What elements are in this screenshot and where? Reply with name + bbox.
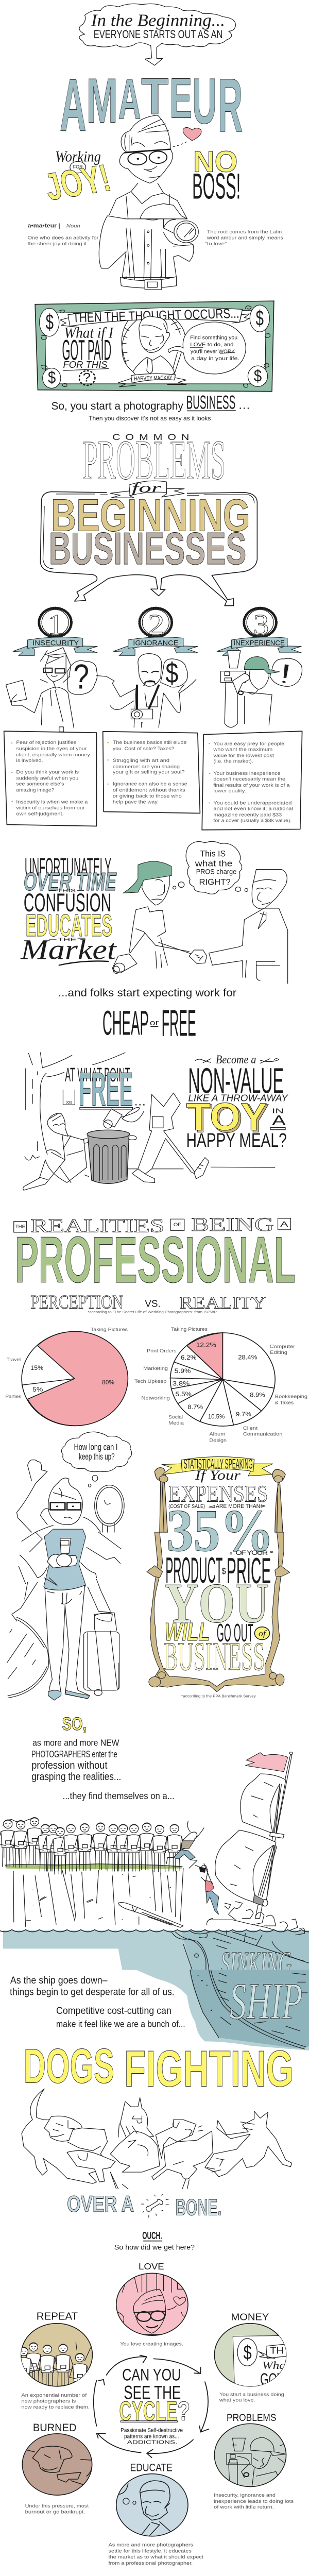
- illustration: tree: [26, 1053, 125, 1094]
- bill corner ornaments: [40, 305, 270, 388]
- pie chart: perception: [5, 1327, 128, 1426]
- character: insecure woman: [6, 648, 97, 732]
- text: see the cycle: CYCLE: [119, 2396, 177, 2426]
- panel: common problems heading: [13, 429, 301, 655]
- box: insecurity list: amazing image?: [16, 788, 54, 793]
- box: ignorance list: you. Cost of sale? Taxes?: [113, 746, 175, 752]
- badge 3: inexperience: [217, 608, 301, 655]
- text: no boss: NO: [193, 145, 237, 178]
- pie chart: reality: Editing: [270, 1350, 287, 1355]
- panel: definition and money bill: [28, 216, 283, 442]
- title: amateur: A: [60, 63, 87, 147]
- pie chart: perception: 5%: [32, 1386, 43, 1394]
- box: inexperience list: who want the maximum: [213, 747, 272, 752]
- text: see the cycle: ?: [177, 2396, 190, 2426]
- text: start a photography business: [51, 392, 250, 421]
- caption: educate: the market as to what it should expect: [108, 2554, 203, 2560]
- panel: confusion educates the market: [20, 841, 288, 1101]
- illustration: camera dropped in trash: [80, 1107, 144, 1183]
- box: ignorance list: Ignorance can also be a sense: [113, 782, 187, 787]
- heading: common: COMMON: [112, 433, 189, 442]
- pie chart: reality: 8.9%: [250, 1392, 265, 1399]
- text: see the cycle: ADDICTIONS.: [127, 2439, 177, 2445]
- badge 2: ignorance: [113, 608, 198, 655]
- ornate sign continued: your product price you will go out of business: OF YOUR: [235, 1550, 268, 1557]
- hull and water bottom: [136, 1970, 309, 2050]
- text: ship goes down: make it feel like we are a bunch of...: [56, 2020, 185, 2029]
- ornate sign: statistically speaking: ARE MORE THAN: [216, 1502, 260, 1509]
- thought cloud: how long can i keep this up: How long can I: [74, 1443, 117, 1452]
- thought cloud: how long can i keep this up: [61, 1432, 132, 1487]
- text: what if i got paid: What if I: [64, 325, 114, 341]
- text: ship goes down: things begin to get desperate for all of us.: [10, 1986, 175, 1997]
- box: insecurity list: suspicion in the eyes of your: [16, 746, 87, 752]
- pie chart: reality: 8.7%: [187, 1404, 203, 1411]
- badge 2: ignorance: IGNORANCE: [133, 639, 178, 647]
- panel: over a bone and love: [21, 2194, 286, 2387]
- panel: perception vs reality pie charts: [5, 1327, 307, 1564]
- pie chart: reality: Social: [168, 1415, 183, 1420]
- text: so, as more and more: SO,: [62, 1714, 87, 1734]
- pie chart: reality: [134, 1327, 307, 1443]
- text: over time this confusion educates the market: Market: [20, 934, 117, 965]
- panel: confusion educates the market: EDUCATES: [26, 908, 112, 943]
- text: ouch: OUCH.: [142, 2230, 162, 2242]
- pie chart: reality: Computer: [269, 1344, 295, 1349]
- text: over a bone: [67, 2191, 221, 2220]
- text: new photographers: PHOTOGRAPHERS enter the: [31, 1750, 117, 1760]
- panel: three problems: UNFORTUNATELY: [25, 853, 111, 882]
- text: does free: ...: [134, 1096, 146, 1108]
- box: ignorance list: your gift or selling your soul?: [113, 770, 185, 775]
- cycle: problems: PROBLEMS: [227, 2412, 276, 2423]
- text: see the cycle: Passionate Self-destructive: [121, 2427, 183, 2433]
- jumping figures: [166, 1821, 219, 1914]
- text: over time this confusion educates the market: OVER TIME: [24, 868, 117, 895]
- title: amateur: [60, 63, 243, 148]
- text: working for joy: FOR: [73, 165, 83, 170]
- frame with arrows: [40, 492, 257, 606]
- panel: amateur intro: [40, 4, 243, 219]
- text: definition: the sheer joy of doing it: [28, 241, 87, 247]
- caption: repeat: An exponential number of: [21, 2393, 87, 2398]
- illustration: handshake: [112, 861, 288, 984]
- text: so, as more and more: as more and more NEW: [32, 1738, 119, 1748]
- text: can you: CAN YOU: [122, 2365, 181, 2384]
- text: what if i got paid: FOR THIS: [63, 359, 108, 370]
- heading: perception vs reality: REALITY: [179, 1293, 266, 1312]
- box: insecurity list: [4, 731, 96, 826]
- pie chart: reality: 5.5%: [176, 1391, 192, 1398]
- title: amateur: T: [141, 67, 169, 125]
- caption: educate: As more and more photographers: [108, 2543, 193, 2548]
- caption: educate: settle for this lifestyle, it educates: [108, 2549, 192, 2554]
- ornate sign continued: your product price you will go out of business: $: [221, 1566, 226, 1576]
- text: see the cycle: [119, 2382, 190, 2445]
- cycle arrows bottom: [94, 2380, 209, 2458]
- text: definition: a•ma•teur |: [28, 223, 60, 229]
- text: ouch: [114, 2230, 195, 2251]
- box: inexperience list: (i.e. the market).: [213, 759, 253, 764]
- bill corner ornaments: $: [254, 366, 262, 385]
- text: become a non-value: Become a: [216, 1053, 256, 1066]
- box: ignorance list: of entitlement without thanks: [113, 788, 185, 793]
- text: ouch: So how did we get here?: [114, 2244, 195, 2251]
- box: insecurity list: victim of ourselves from our: [16, 805, 85, 811]
- pie chart: perception: 15%: [30, 1365, 43, 1371]
- text: become a non-value: [188, 1053, 284, 1101]
- caption: problems: of work with little return.: [214, 2504, 274, 2510]
- citation: *according to "The Secret Life of Wedding Photographers" from ISPWP: [88, 1310, 217, 1314]
- ornate sign continued: your product price you will go out of business: of: [259, 1629, 267, 1638]
- box: ignorance list: commerce: are you sharing: [113, 764, 180, 769]
- character: woman full length with suitcase: [7, 1529, 121, 1700]
- text: definition: [28, 223, 99, 247]
- heading: perception vs reality: [30, 1292, 266, 1313]
- text: folks expect cheap or free: FREE: [162, 1002, 196, 1044]
- cycle: burned: [22, 2422, 92, 2495]
- ornate sign continued: your product price you will go out of business: *according to the PPA Benchmark Survey: [181, 1693, 256, 1698]
- text: latin root: The root comes from the Latin: [207, 229, 282, 234]
- badge 1: insecurity: INSECURITY: [32, 639, 79, 647]
- ornate sign: statistically speaking: If Your: [195, 1468, 241, 1483]
- box: insecurity list: own self-judgment.: [16, 811, 64, 817]
- character: inexperienced kid with cap: [221, 651, 302, 727]
- pie chart: reality: Tech Upkeep: [134, 1379, 166, 1384]
- money bill illustration: GOT PAID: [62, 334, 111, 366]
- pie chart: reality: Taking Pictures: [171, 1327, 208, 1332]
- pie chart: reality: 5.9%: [175, 1368, 191, 1375]
- pie chart: reality: Client: [243, 1426, 258, 1431]
- title: amateur: A: [118, 67, 141, 131]
- thought cloud: how long can i keep this up: keep this up?: [79, 1452, 115, 1462]
- cliff with grass: [5, 1864, 183, 1927]
- text: start a photography business: ...: [238, 400, 250, 412]
- text: throw-away toy in a happy meal: TOY: [188, 1096, 269, 1141]
- text: ship goes down: As the ship goes down–: [10, 1975, 108, 1986]
- panel: dogs fighting: [10, 1970, 309, 2189]
- heading: dogs fighting: DOGS: [24, 2039, 114, 2093]
- waves: [0, 1929, 309, 1932]
- heading: realities of being a: A: [280, 1220, 288, 1228]
- text: working for joy: JOY!: [40, 157, 115, 209]
- thought cloud: pros charge: [173, 841, 248, 894]
- text: what if i got paid: ?: [83, 370, 91, 384]
- bill ribbon: [60, 306, 249, 327]
- text: new photographers: ...they find themselves on a...: [63, 1791, 175, 1801]
- pie chart: reality: 3.8%: [173, 1380, 190, 1387]
- cycle: money: $: [244, 2342, 252, 2364]
- text: start a photography business: Then you discover it's not as easy as it looks: [89, 415, 211, 421]
- heading: realities of being a: [14, 1214, 290, 1236]
- cycle arrows top: [98, 2355, 201, 2385]
- box: inexperience list: doesn't necessarily mean the: [213, 776, 285, 782]
- pie chart: reality: Print Orders: [147, 1348, 176, 1354]
- cycle: love: LOVE: [139, 2262, 164, 2272]
- pie chart: perception: Travel: [7, 1357, 21, 1363]
- text: folks expect cheap or free: or: [150, 1019, 159, 1027]
- speech bubble: harvey mackay quote: LOVE to do, and: [190, 341, 233, 347]
- thought cloud: pros charge: RIGHT?: [199, 878, 231, 887]
- ornate sign: statistically speaking: (COST OF SALE): [168, 1503, 205, 1509]
- box: ignorance list: The business basics still elude: [113, 740, 186, 745]
- cycle: educate: [116, 2462, 188, 2536]
- ship hull top: [171, 1930, 309, 1982]
- text: no boss: [192, 145, 241, 207]
- box: ignorance list: Struggling with art and: [113, 758, 169, 764]
- box: inexperience list: and not even know it; a national: [213, 806, 293, 811]
- panel: sinking ship: [0, 1750, 309, 1982]
- box: insecurity list: is involved.: [16, 758, 43, 764]
- box: inexperience list: magazine recently paid $33: [213, 812, 282, 818]
- text: definition: One who does an activity for: [28, 235, 99, 241]
- thought cloud heading: In the Beginning...: [91, 11, 225, 30]
- bill corner ornaments: $: [48, 368, 56, 386]
- pie chart: perception: Parties: [5, 1394, 21, 1399]
- text: throw-away toy in a happy meal: A: [272, 1112, 286, 1128]
- panel: free becomes disposable: FREE: [79, 1063, 133, 1115]
- badge 1: insecurity: [13, 608, 97, 655]
- cycle: money: [214, 2312, 288, 2388]
- ornate sign continued: your product price you will go out of business: WILL: [165, 1618, 210, 1646]
- heading: perception vs reality: PERCEPTION: [30, 1292, 123, 1313]
- icon: bone: [142, 2194, 168, 2217]
- cycle: money: GOT: [260, 2370, 284, 2388]
- text: what if i got paid: [62, 325, 114, 385]
- box: insecurity list: Insecurity is when we make a: [16, 799, 88, 805]
- character: insecure woman: ?: [73, 657, 89, 696]
- text: R: [218, 63, 243, 148]
- pie chart: perception: 80%: [102, 1379, 114, 1386]
- caption: love: You love creating images.: [120, 2342, 183, 2347]
- ribbon: for: [110, 480, 184, 498]
- pie chart: reality: Design: [209, 1438, 227, 1443]
- box: ignorance list: help pave the way.: [113, 799, 159, 805]
- water and hull background: [3, 1930, 309, 1970]
- box: ignorance list: or giving back to those who: [113, 793, 182, 799]
- text: latin root: [205, 229, 283, 246]
- character: amateur sitting: [23, 1113, 89, 1190]
- caption: money: what you love.: [219, 2398, 255, 2403]
- pie chart: reality: 9.7%: [236, 1411, 251, 1418]
- text: new photographers: [31, 1750, 175, 1801]
- caption: burned: Under this pressure, most: [25, 2503, 89, 2509]
- cycle: love: [116, 2262, 188, 2335]
- ornate sign continued: your product price you will go out of business: [147, 1532, 289, 1698]
- pie chart: reality: Networking: [141, 1396, 170, 1401]
- panel: three problems: [4, 648, 302, 882]
- heading: realities of being a: THE: [15, 1224, 25, 1229]
- text: definition: Noun: [66, 224, 80, 229]
- caption: educate: [108, 2543, 203, 2566]
- character: ignorant man: $: [165, 656, 178, 689]
- caption: problems: Insecurity, ignorance and: [214, 2493, 276, 2498]
- box: inexperience list: [202, 731, 302, 830]
- heading: beginning businesses: [49, 489, 250, 574]
- pen in water: [118, 1903, 183, 1927]
- ornate sign: statistically speaking: [154, 1456, 285, 1564]
- box: insecurity list: see someone else's: [16, 782, 64, 787]
- bill corner ornaments: $: [256, 307, 264, 330]
- speech bubble: harvey mackay quote: [168, 322, 246, 374]
- text: start a photography business: So, you start a photography: [51, 400, 183, 412]
- character: ignorant man: [96, 654, 196, 727]
- speech bubble: harvey mackay quote: a day in your life.: [191, 355, 239, 362]
- people on deck: [207, 1902, 304, 1935]
- illustration: tree trunk and ground: [25, 1094, 275, 1169]
- panel: free becomes disposable: [14, 1063, 296, 1314]
- cycle: educate: EDUCATE: [130, 2462, 173, 2474]
- caption: repeat: [21, 2393, 90, 2410]
- text: over time this confusion educates the market: [20, 868, 117, 965]
- text: ship goes down: Competitive cost-cutting can: [56, 2005, 171, 2016]
- thought cloud heading: [79, 4, 235, 65]
- panel: woman and going out of business sign: [7, 1529, 289, 1748]
- box: inexperience list: Your business inexperience: [213, 771, 281, 776]
- thought cloud: pros charge: what the: [195, 859, 233, 869]
- illustration: dogs fighting: [22, 2089, 291, 2189]
- panel: confusion educates the market: AT WHAT POINT: [65, 1064, 130, 1086]
- box: inexperience list: You could be underappreciated: [213, 801, 291, 806]
- portrait: harvey mackay: [118, 316, 186, 387]
- portrait: harvey mackay: HARVEY MACKAY: [134, 374, 173, 382]
- text: new photographers: profession without: [31, 1759, 108, 1771]
- caption: problems: [214, 2493, 294, 2510]
- text: working for joy: Working: [55, 148, 101, 165]
- box: insecurity list: Do you think your work is: [16, 770, 79, 775]
- text: start a photography business: BUSINESS: [186, 392, 235, 413]
- cycle: money: TH: [270, 2346, 284, 2356]
- crowd of photographers: [0, 1818, 185, 1874]
- speech bubble: harvey mackay quote: Find something you: [190, 334, 237, 341]
- badge 3: inexperience: INEXPERIENCE: [233, 639, 285, 647]
- text: folks expect cheap or free: [58, 987, 236, 1044]
- cycle: repeat: [21, 2312, 93, 2387]
- caption: money: You start a business doing: [219, 2392, 284, 2397]
- cycle: money: Wha: [262, 2360, 286, 2371]
- text: see the cycle: patterns are known as...: [124, 2433, 179, 2439]
- pie chart: reality: & Taxes: [275, 1400, 294, 1405]
- panel: the cycle: [21, 2380, 294, 2566]
- ship mast, sails and flag: [215, 1752, 293, 1918]
- pie chart: reality: 6.2%: [181, 1354, 197, 1362]
- text: folks expect cheap or free: CHEAP: [102, 1004, 149, 1042]
- badge 1: insecurity: 1: [47, 609, 64, 641]
- panel: over a bone and love: BONE.: [176, 2195, 221, 2220]
- text: so, as more and more: [32, 1714, 119, 1748]
- character: amateur head: [108, 115, 201, 219]
- pie chart: reality: Media: [168, 1420, 184, 1426]
- box: inexperience list: You are easy prey for people: [213, 741, 284, 747]
- ribbon: for: for: [132, 480, 162, 495]
- cycle: problems: [214, 2412, 286, 2488]
- title: amateur: M: [87, 66, 118, 136]
- text: ship goes down: [10, 1975, 185, 2029]
- box: insecurity list: suddenly awful when you: [16, 776, 78, 781]
- pie chart: reality: 28.4%: [238, 1354, 258, 1361]
- text: throw-away toy in a happy meal: TOY: [186, 1095, 267, 1139]
- cycle: burned: BURNED: [33, 2422, 76, 2434]
- money bill illustration: [35, 301, 274, 392]
- badge 2: ignorance: 2: [148, 609, 165, 641]
- character: amateur body with camera: [99, 216, 198, 290]
- caption: burned: burnout or go bankrupt.: [25, 2510, 85, 2515]
- pie chart: reality: Marketing: [143, 1366, 168, 1371]
- text: throw-away toy in a happy meal: IN: [272, 1108, 284, 1115]
- box: inexperience list: lower quality.: [213, 788, 246, 794]
- box: inexperience list: value for the lowest cost: [213, 753, 274, 758]
- text: folks expect cheap or free: ...and folks start expecting work for: [58, 987, 236, 999]
- text: does free: DOES: [66, 1100, 73, 1105]
- box: ignorance list: [103, 732, 200, 813]
- pie chart: reality: Album: [209, 1432, 226, 1437]
- heading: realities of being a: BEING: [191, 1214, 274, 1235]
- bill corner ornaments: $: [46, 310, 54, 334]
- title: amateur: E: [169, 66, 192, 130]
- title: amateur: U: [192, 65, 217, 137]
- caption: educate: from a professional photographer.: [108, 2561, 193, 2566]
- thought cloud: pros charge: This IS: [200, 850, 226, 859]
- text: over time this confusion educates the market: THIS: [57, 888, 76, 893]
- text: does free: [63, 1063, 146, 1115]
- caption: repeat: new photographers is: [21, 2399, 76, 2404]
- box: inexperience list: for a cover (usually a $3k value).: [213, 818, 291, 823]
- text: over a bone: OVER A: [67, 2191, 134, 2216]
- pie chart: reality: 12.2%: [196, 1342, 216, 1349]
- caption: problems: inexperience leads to doing lots: [214, 2499, 294, 2504]
- character: walking businessman: [132, 1093, 209, 1182]
- text: latin root: word amour and simply means: [207, 235, 283, 241]
- cycle: money: MONEY: [231, 2312, 269, 2323]
- text: over time this confusion educates the market: THE: [58, 937, 76, 942]
- caption: burned: [25, 2503, 89, 2515]
- box: inexperience list: final results of your work is of a: [213, 783, 290, 788]
- caption: repeat: now ready to replace them.: [21, 2404, 90, 2410]
- heading: dogs fighting: [24, 2039, 294, 2097]
- text: new photographers: grasping the realities...: [31, 1771, 121, 1782]
- heading: realities of being a: OF: [174, 1223, 181, 1227]
- text: working for joy: [40, 148, 115, 209]
- box: insecurity list: Fear of rejection justifies: [16, 740, 76, 745]
- caption: money: [219, 2392, 284, 2403]
- heading: perception vs reality: VS.: [145, 1299, 161, 1309]
- heading: realities of being a: REALITIES: [30, 1215, 165, 1236]
- text: see the cycle: SEE THE: [124, 2382, 181, 2403]
- pie chart: reality: Communication: [243, 1432, 282, 1437]
- character: woman on phone, head and arm: [17, 1460, 124, 1532]
- speech bubble: harvey mackay quote: you'll never WORK: [191, 348, 235, 354]
- panel: confusion educates the market: CONFUSION: [24, 888, 111, 917]
- cycle: repeat: REPEAT: [37, 2310, 78, 2322]
- box: insecurity list: client, especially when money: [16, 752, 91, 757]
- text: latin root: “to love”: [205, 241, 227, 246]
- thought cloud: pros charge: PROS charge: [196, 868, 236, 876]
- badge 3: inexperience: 3: [253, 609, 269, 641]
- pie chart: reality: 10.5%: [208, 1413, 225, 1420]
- pie chart: perception: Taking Pictures: [91, 1327, 128, 1332]
